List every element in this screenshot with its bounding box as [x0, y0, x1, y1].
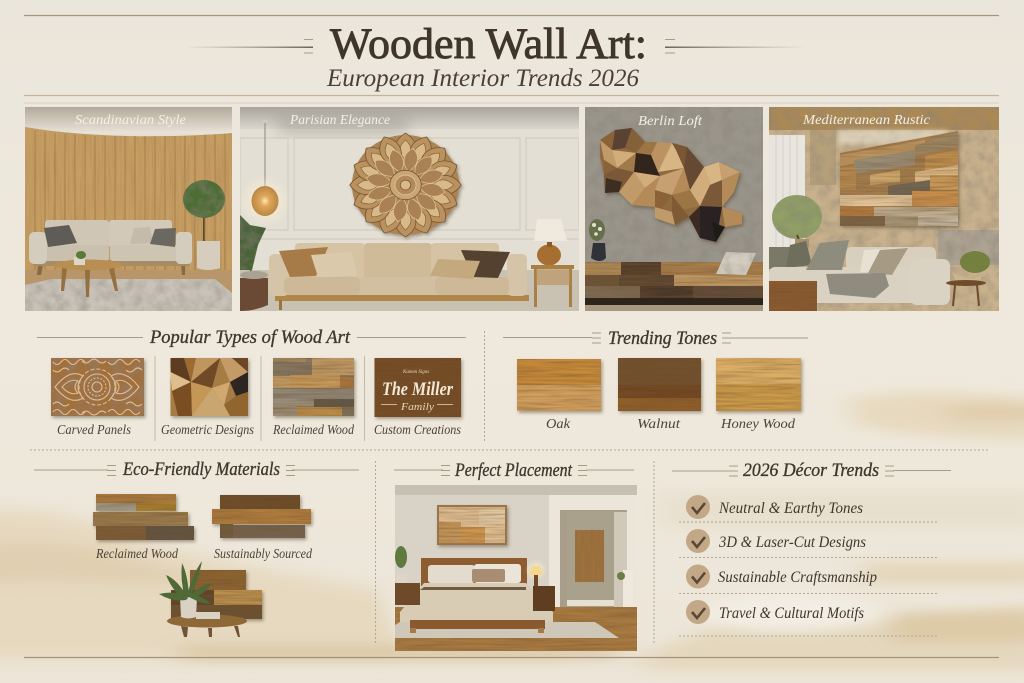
honey wood swatch [716, 358, 801, 411]
heading: Popular Types of Wood Art [149, 328, 351, 348]
pillows [428, 564, 521, 583]
custom creations label: Custom Creations [374, 422, 461, 437]
geometric panel [170, 358, 248, 416]
title: Wooden Wall Art: [330, 21, 647, 68]
trend: Travel & Cultural Motifs: Travel & Cultural Motifs [719, 605, 864, 622]
reclaimed plank artwork [840, 131, 958, 226]
section: Trending Tones [503, 329, 808, 431]
reclaimed wood stack [93, 494, 194, 540]
section: Popular Types of Wood Art [37, 328, 466, 441]
headboard [421, 558, 527, 586]
potted plant [240, 215, 268, 311]
reclaimed panel [273, 358, 354, 416]
caption: Mediterranean Rustic [802, 113, 931, 128]
custom sign: The Miller [382, 379, 454, 400]
plant and planter [183, 180, 225, 270]
oak swatch [517, 359, 601, 411]
panel: Berlin Loft [585, 107, 763, 311]
honey wood label: Honey Wood [720, 416, 795, 431]
reclaimed wood bench [585, 262, 763, 298]
geometric designs label: Geometric Designs [161, 422, 254, 437]
section divider rule [30, 331, 990, 645]
trend: Neutral & Earthy Tones [679, 495, 937, 522]
geometric wood artwork [600, 128, 742, 242]
carved panel [51, 358, 144, 416]
panel: Parisian Elegance [239, 107, 579, 311]
walnut label: Walnut [637, 416, 681, 431]
custom sign: Kamen Signs [402, 370, 429, 375]
panel: Mediterranean Rustic [769, 107, 999, 311]
heading: Trending Tones [608, 329, 717, 349]
custom sign [374, 358, 461, 417]
heading [394, 461, 634, 481]
trend: 3D & Laser-Cut Designs [679, 529, 937, 558]
sofa [769, 240, 950, 305]
bedroom scene [395, 485, 637, 651]
reclaimed wood label: Reclaimed Wood [272, 422, 354, 437]
subtitle: European Interior Trends 2026 [326, 65, 639, 92]
carved panels label: Carved Panels [57, 422, 131, 437]
sofa [29, 220, 192, 275]
pendant lamp [248, 120, 282, 218]
bed [400, 583, 553, 633]
trend: Neutral & Earthy Tones: Neutral & Earthy Tones [718, 500, 863, 517]
trend: Sustainable Craftsmanship: Sustainable Craftsmanship [718, 569, 877, 586]
sustainably sourced stack [212, 495, 311, 538]
side plant and stool [946, 251, 990, 306]
floor [395, 607, 637, 651]
caption: Berlin Loft [638, 114, 703, 129]
custom sign: Family [400, 401, 434, 413]
walnut swatch [618, 358, 701, 411]
separators [155, 356, 364, 441]
rug [25, 279, 232, 311]
heading: Perfect Placement [454, 461, 573, 481]
caption: Scandinavian Style [75, 113, 186, 128]
title ornaments [185, 40, 805, 53]
pillow [716, 252, 756, 275]
heading: Eco-Friendly Materials [122, 460, 280, 480]
wall mouldings [240, 138, 579, 239]
footer rule [24, 656, 999, 658]
panel: Scandinavian Style [25, 107, 232, 311]
wooden chest [769, 281, 817, 311]
heading [503, 329, 808, 349]
coffee table [54, 251, 122, 297]
section: Perfect Placement [394, 461, 637, 651]
vase with flowers [589, 219, 606, 261]
section: 2026 Décor Trends [672, 461, 951, 636]
trend: Travel & Cultural Motifs [679, 600, 937, 636]
trend: Sustainable Craftsmanship [679, 564, 937, 594]
doorway [549, 495, 637, 610]
section: Eco-Friendly Materials [34, 460, 359, 637]
header rules [24, 16, 999, 103]
caption: Parisian Elegance [289, 113, 390, 128]
slatted wood wall [25, 127, 232, 275]
olive plant [772, 195, 822, 247]
heading: 2026 Décor Trends [743, 461, 879, 481]
rug [395, 622, 619, 638]
nightstands and lamp [395, 546, 555, 611]
plant on wooden shelf with planks [159, 561, 262, 637]
curtains [769, 135, 805, 250]
reclaimed wood label: Reclaimed Wood [95, 546, 178, 561]
heading [672, 461, 951, 481]
wood floor [25, 270, 232, 293]
carved mandala artwork [350, 133, 461, 237]
sustainably sourced label: Sustainably Sourced [214, 546, 312, 561]
table lamp and side table [531, 219, 574, 307]
sofa [269, 243, 529, 310]
hallway artwork [575, 530, 604, 582]
trend: 3D & Laser-Cut Designs: 3D & Laser-Cut Designs [718, 534, 866, 551]
bedroom artwork [437, 505, 507, 545]
heading [34, 460, 359, 480]
oak label: Oak [546, 416, 571, 431]
